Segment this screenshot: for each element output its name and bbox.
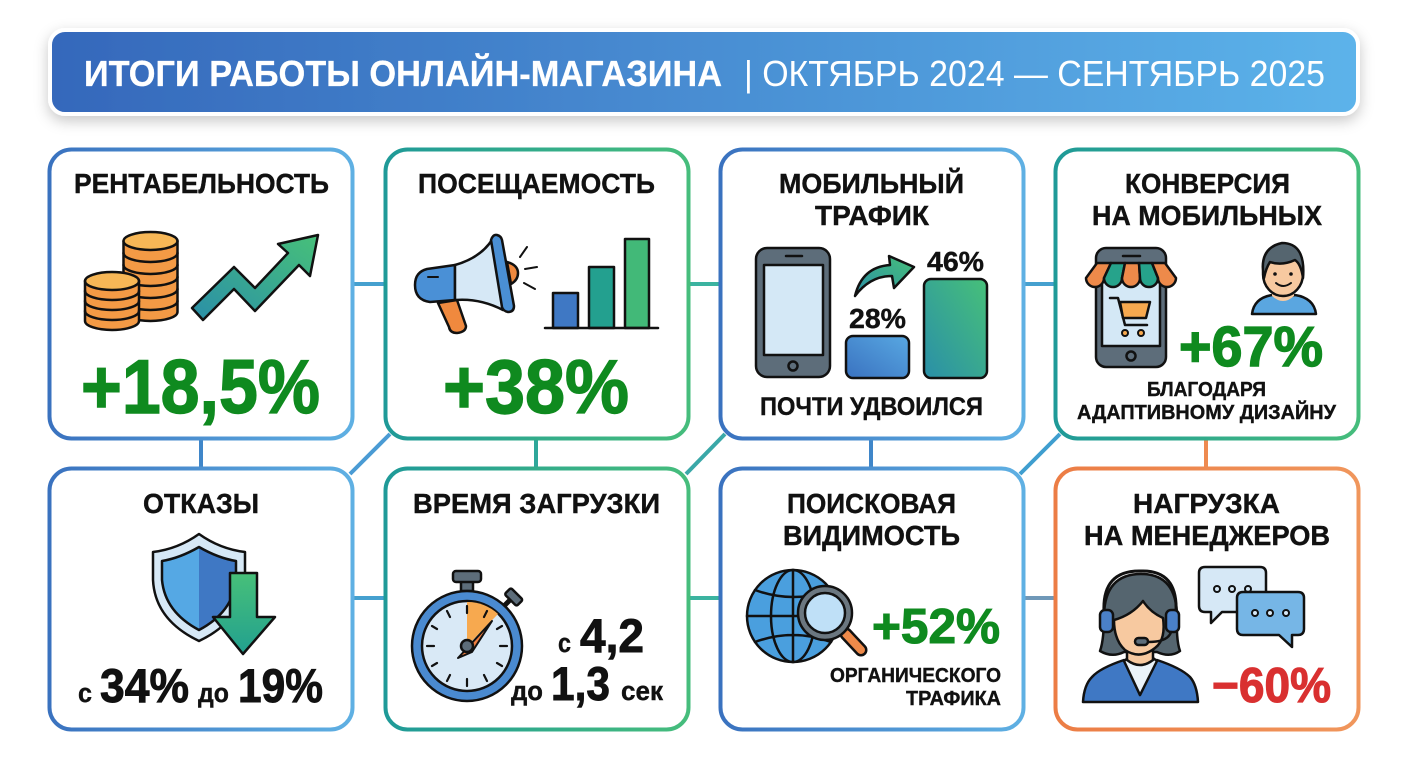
label 28%: 28% [849,303,906,334]
panel: время загрузки [386,468,688,730]
icon: smartphone [756,248,830,377]
value: 1,3 [551,657,610,710]
value: +67% [1179,315,1323,379]
value: с [78,678,92,708]
icon: stopwatch [412,571,523,701]
heading: ВРЕМЯ ЗАГРУЗКИ [413,488,660,519]
value: +52% [872,600,1000,654]
heading: ПОИСКОВАЯ [787,488,956,519]
heading: РЕНТАБЕЛЬНОСТЬ [74,168,329,199]
value [78,659,323,712]
icon: megaphone [415,235,537,333]
panel: конверсия на мобильных: АДАПТИВНОМУ ДИЗАЙНУ [1077,400,1337,424]
panel: мобильный трафик [720,150,1024,438]
bar: 46% [924,279,987,378]
heading: ПОСЕЩАЕМОСТЬ [418,168,655,199]
panel: нагрузка на менеджеров [1056,468,1358,730]
value: сек [621,676,663,706]
value: до [511,676,543,706]
panel: поисковая видимость: ТРАФИКА [906,688,1001,710]
panel: нагрузка на менеджеров: НА МЕНЕДЖЕРОВ [1084,520,1330,551]
panel: конверсия на мобильных [1056,150,1358,438]
connector lines [201,284,1206,598]
value: 19% [238,659,323,712]
caption: ПОЧТИ УДВОИЛСЯ [760,393,983,421]
panel: мобильный трафик: ТРАФИК [815,200,930,231]
panel: поисковая видимость: ВИДИМОСТЬ [783,520,960,551]
value: −60% [1212,659,1331,713]
arrow [855,256,914,296]
panel: поисковая видимость [720,468,1024,730]
icon: customer [1252,243,1316,314]
title text: ИТОГИ РАБОТЫ ОНЛАЙН-МАГАЗИНА [84,52,722,94]
period: | ОКТЯБРЬ 2024 — СЕНТЯБРЬ 2025 [744,53,1325,94]
icon: bar chart [545,239,658,328]
icon: globe with magnifier [747,570,861,662]
icon: chat bubbles [1199,567,1304,647]
panel: конверсия на мобильных: НА МОБИЛЬНЫХ [1092,200,1322,231]
panel: отказы [50,468,352,730]
panel: рентабельность [50,150,352,438]
heading: МОБИЛЬНЫЙ [779,167,964,199]
icon: shield with arrow [153,534,275,654]
bar: 28% [846,336,909,378]
value: до [198,678,229,708]
caption: ОРГАНИЧЕСКОГО [830,665,1001,687]
heading: ОТКАЗЫ [143,488,259,519]
label 46%: 46% [927,246,984,277]
value: +18,5% [81,345,320,430]
caption: БЛАГОДАРЯ [1147,379,1266,401]
panel: посещаемость [386,150,688,438]
title banner [50,30,1358,114]
icon: support agent [1083,571,1198,702]
heading: НАГРУЗКА [1133,488,1280,519]
value: +38% [443,345,629,430]
heading: КОНВЕРСИЯ [1125,168,1290,199]
value: 4,2 [580,609,644,662]
value: с [558,628,571,658]
icon: shop phone [1086,248,1176,367]
value: 34% [100,659,189,712]
icon: rising arrow [192,235,318,320]
value [511,609,663,710]
icon: coins [85,232,178,330]
